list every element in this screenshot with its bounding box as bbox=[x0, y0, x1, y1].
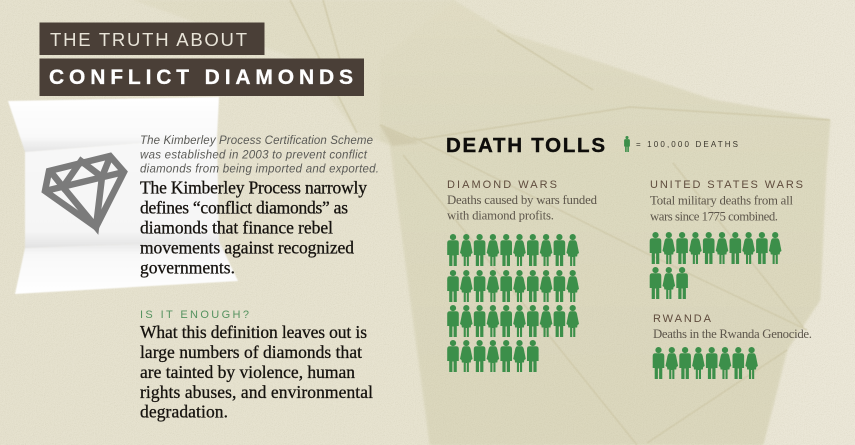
heading: death tolls: DEATH TOLLS bbox=[446, 134, 605, 157]
panel: diamond wars: Deaths caused by wars funded bbox=[447, 193, 598, 207]
panel: rwanda: Deaths in the Rwanda Genocide. bbox=[653, 327, 812, 341]
intro italic text bbox=[140, 135, 379, 176]
intro italic text: The Kimberley Process Certification Scheme bbox=[140, 135, 373, 147]
title: conflict diamonds: CONFLICT DIAMONDS bbox=[49, 66, 353, 89]
text block: narrow definition: governments. bbox=[140, 258, 235, 278]
text block: narrow definition: The Kimberley Process narrowly bbox=[140, 178, 367, 198]
panel: rwanda: RWANDA bbox=[653, 313, 712, 325]
icon: diamond bbox=[45, 156, 124, 227]
text block: what the definition leaves out: degradation. bbox=[140, 402, 228, 422]
text block: what the definition leaves out: large numbers of diamonds that bbox=[140, 342, 362, 362]
panel: diamond wars: DIAMOND WARS bbox=[447, 179, 557, 191]
title: conflict diamonds bbox=[40, 58, 364, 96]
panel: folded paper bbox=[8, 97, 238, 294]
title: the truth about: THE TRUTH ABOUT bbox=[50, 29, 247, 50]
intro italic text: diamonds from being imported and exported. bbox=[140, 164, 379, 176]
panel: diamond wars bbox=[447, 179, 598, 372]
pictogram: rwanda figures bbox=[653, 347, 758, 379]
text block: narrow definition: defines “conflict diamonds” as bbox=[140, 198, 348, 218]
panel: united states wars bbox=[650, 179, 803, 299]
text block: what the definition leaves out: rights abuses, and environmental bbox=[140, 382, 373, 402]
title: the truth about bbox=[40, 22, 264, 55]
legend: one figure equals 100,000 deaths: = 100,000 DEATHS bbox=[636, 140, 738, 149]
legend: one figure equals 100,000 deaths bbox=[624, 136, 738, 152]
text block: what the definition leaves out: are tainted by violence, human bbox=[140, 362, 355, 382]
text block: what the definition leaves out bbox=[140, 322, 373, 422]
intro italic text: was established in 2003 to prevent conflict bbox=[140, 150, 368, 162]
text block: narrow definition: movements against recognized bbox=[140, 238, 354, 258]
text block: narrow definition: diamonds that finance rebel bbox=[140, 218, 333, 238]
panel: diamond wars: with diamond profits. bbox=[447, 208, 554, 222]
panel: united states wars: wars since 1775 combined. bbox=[650, 210, 778, 224]
panel: rwanda bbox=[653, 313, 812, 379]
panel: united states wars: Total military deaths from all bbox=[650, 194, 793, 208]
pictogram: united states wars figures bbox=[650, 232, 782, 299]
panel: united states wars: UNITED STATES WARS bbox=[650, 179, 803, 191]
text block: what the definition leaves out: What this definition leaves out is bbox=[140, 322, 367, 342]
pictogram: diamond wars figures bbox=[447, 234, 579, 372]
heading: is it enough: IS IT ENOUGH? bbox=[140, 309, 249, 321]
text block: narrow definition bbox=[140, 178, 367, 278]
